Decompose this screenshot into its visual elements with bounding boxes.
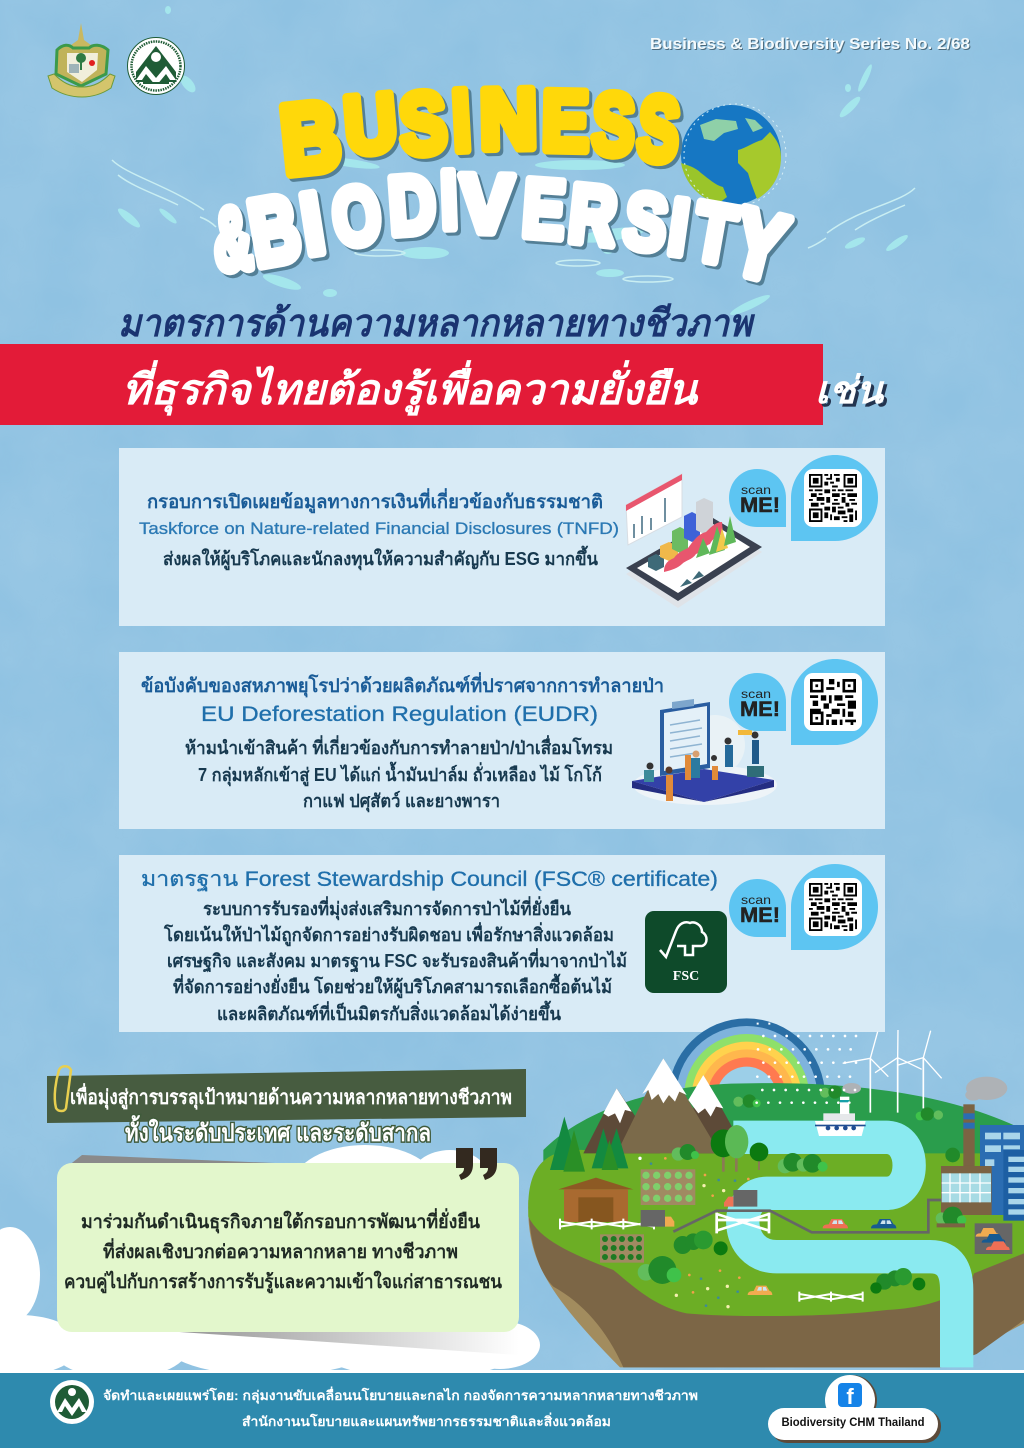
mountains <box>583 1058 747 1153</box>
QR code bubble <box>791 659 878 745</box>
trees and bushes <box>550 1085 960 1294</box>
FSC description <box>163 896 627 1024</box>
EUDR description: กาแฟ ปศุสัตว์ และยางพารา <box>303 790 500 813</box>
EUDR description: ห้ามนำเข้าสินค้า ที่เกี่ยวข้องกับการทำลายป่า/ป่าเสื่อมโทรม <box>185 735 613 758</box>
FSC heading: มาตรฐาน Forest Stewardship Council (FSC® certificate) <box>141 868 718 891</box>
icon: FSC logo: FSC <box>673 969 699 984</box>
title: & BIODIVERSITY: I <box>439 154 459 246</box>
barn <box>558 1178 633 1222</box>
panel: TNFD <box>119 448 885 626</box>
title: & BIODIVERSITY: B <box>242 176 307 287</box>
quote text: ที่ส่งผลเชิงบวกต่อความหลากหลาย ทางชีวภาพ <box>103 1238 458 1263</box>
river <box>733 1137 957 1367</box>
facebook badge: f <box>846 1384 854 1409</box>
ship <box>815 1097 866 1136</box>
EUDR English name: EU Deforestation Regulation (EUDR) <box>201 703 598 726</box>
quote text: มาร่วมกันดำเนินธุรกิจภายใต้กรอบการพัฒนาที่ยั่งยืน <box>81 1208 480 1234</box>
red band headline: ที่ธุรกิจไทยต้องรู้เพื่อความยั่งยืน <box>122 360 699 416</box>
footer logo <box>50 1380 94 1424</box>
FSC description: ที่จัดการอย่างยั่งยืน โดยช่วยให้ผู้บริโภคสามารถเลือกซื้อต้นไม้ <box>173 973 612 999</box>
title: BUSINESS: E <box>541 75 590 169</box>
facebook badge <box>768 1375 941 1443</box>
footer text: จัดทำและเผยแพร่โดย: กลุ่มงานขับเคลื่อนนโยบายและกลไก กองจัดการความหลากหลายทางชีวภาพ <box>103 1386 698 1404</box>
title: & BIODIVERSITY: V <box>459 158 514 251</box>
red band <box>0 344 823 425</box>
crop fields <box>600 1169 695 1263</box>
QR code bubble <box>791 455 878 541</box>
Thai headline: มาตรการด้านความหลากหลายทางชีวภาพ <box>118 303 756 345</box>
scan me bubble <box>729 879 786 937</box>
FSC description: และผลิตภัณฑ์ที่เป็นมิตรกับสิ่งแวดล้อมได้ง่ายขึ้น <box>217 1000 562 1024</box>
quote panel <box>57 1148 519 1355</box>
panel: EUDR <box>119 652 885 829</box>
title: BUSINESS: N <box>479 72 538 167</box>
island soil <box>528 1200 1024 1367</box>
EUDR heading: ข้อบังคับของสหภาพยุโรปว่าด้วยผลิตภัณฑ์ที่ปราศจากการทำลายป่า <box>141 672 664 698</box>
footer text: สำนักงานนโยบายและแผนทรัพยากรธรรมชาติและสิ่งแวดล้อม <box>242 1412 611 1429</box>
quote text: ควบคู่ไปกับการสร้างการรับรู้และความเข้าใจแก่สาธารณชน <box>64 1270 502 1294</box>
logo: round agency emblem <box>128 38 184 94</box>
FSC description: เศรษฐกิจ และสังคม มาตรฐาน FSC จะรับรองสินค้าที่มาจากป่าไม้ <box>167 948 627 973</box>
title: & BIODIVERSITY: & <box>209 189 256 290</box>
trucks and cars <box>641 1190 1012 1295</box>
footer text <box>103 1386 698 1429</box>
grass <box>528 1150 1024 1316</box>
TNFD description: ส่งผลให้ผู้บริโภคและนักลงทุนให้ความสำคัญกับ ESG มากขึ้น <box>163 545 599 571</box>
title: & BIODIVERSITY: R <box>565 167 621 263</box>
icon: FSC logo <box>645 911 727 993</box>
title: BUSINESS: S <box>396 74 450 173</box>
back hill <box>543 1083 1024 1187</box>
title: & BIODIVERSITY: D <box>385 157 439 252</box>
title: & BIODIVERSITY: S <box>619 176 673 269</box>
QR code bubble <box>791 864 878 950</box>
icon: clipboard and team <box>632 699 777 805</box>
title: BUSINESS: S <box>590 77 637 174</box>
flowers <box>638 1157 750 1308</box>
title: BUSINESS <box>276 72 683 195</box>
scan me bubble <box>729 673 786 731</box>
icon: quotation marks <box>456 1148 497 1180</box>
title: & BIODIVERSITY <box>209 154 797 301</box>
logo: ministry crest <box>48 23 115 97</box>
title: & BIODIVERSITY: O <box>327 168 386 265</box>
road and bridge <box>560 1200 942 1302</box>
title: BUSINESS: B <box>276 81 345 195</box>
smoke <box>842 1077 1007 1101</box>
title: & BIODIVERSITY: I <box>295 175 330 274</box>
illustration: floating island <box>528 1018 1024 1367</box>
wind turbines <box>843 1030 942 1113</box>
footer band <box>0 1370 1024 1448</box>
label: such as: เช่น <box>815 370 885 412</box>
TNFD heading: กรอบการเปิดเผยข้อมูลทางการเงินที่เกี่ยวข้องกับธรรมชาติ <box>147 488 603 514</box>
rain drops <box>755 1023 857 1104</box>
icon: tablet with charts <box>626 474 762 608</box>
rainbow <box>668 1018 825 1175</box>
factory and buildings <box>936 1104 1024 1227</box>
title: BUSINESS: S <box>634 78 683 182</box>
title: & BIODIVERSITY: I <box>664 183 694 272</box>
panel: FSC <box>119 855 885 1032</box>
goal banner text: เพื่อมุ่งสู่การบรรลุเป้าหมายด้านความหลากหลายทางชีวภาพ <box>70 1082 512 1111</box>
title: BUSINESS: I <box>450 72 473 170</box>
TNFD English name: Taskforce on Nature-related Financial Disclosures (TNFD) <box>139 519 619 538</box>
icon: paperclip <box>55 1066 71 1111</box>
FSC description: โดยเน้นให้ป่าไม้ถูกจัดการอย่างรับผิดชอบ เพื่อรักษาสิ่งแวดล้อม <box>163 922 614 947</box>
title: & BIODIVERSITY: T <box>687 184 743 282</box>
swirl decorations behind title <box>112 6 915 318</box>
title: BUSINESS: U <box>341 77 401 172</box>
FSC description: ระบบการรับรองที่มุ่งส่งเสริมการจัดการป่าไม้ที่ยั่งยืน <box>203 896 572 921</box>
EUDR description: 7 กลุ่มหลักเข้าสู่ EU ได้แก่ น้ำมันปาล์ม ถั่วเหลือง ไม้ โกโก้ <box>198 761 602 787</box>
facebook badge: Biodiversity CHM Thailand <box>782 1417 924 1429</box>
title: & BIODIVERSITY: E <box>520 162 568 256</box>
series label: Business & Biodiversity Series No. 2/68 <box>650 36 970 53</box>
title: & BIODIVERSITY: Y <box>723 188 797 301</box>
clouds <box>0 1145 540 1379</box>
subtitle: national and international: ทั้งในระดับประเทศ และระดับสากล <box>125 1114 431 1147</box>
EUDR description <box>185 735 613 813</box>
goal banner <box>47 1066 526 1123</box>
scan me bubble <box>729 469 786 527</box>
globe <box>681 104 786 206</box>
quote text <box>64 1208 502 1294</box>
